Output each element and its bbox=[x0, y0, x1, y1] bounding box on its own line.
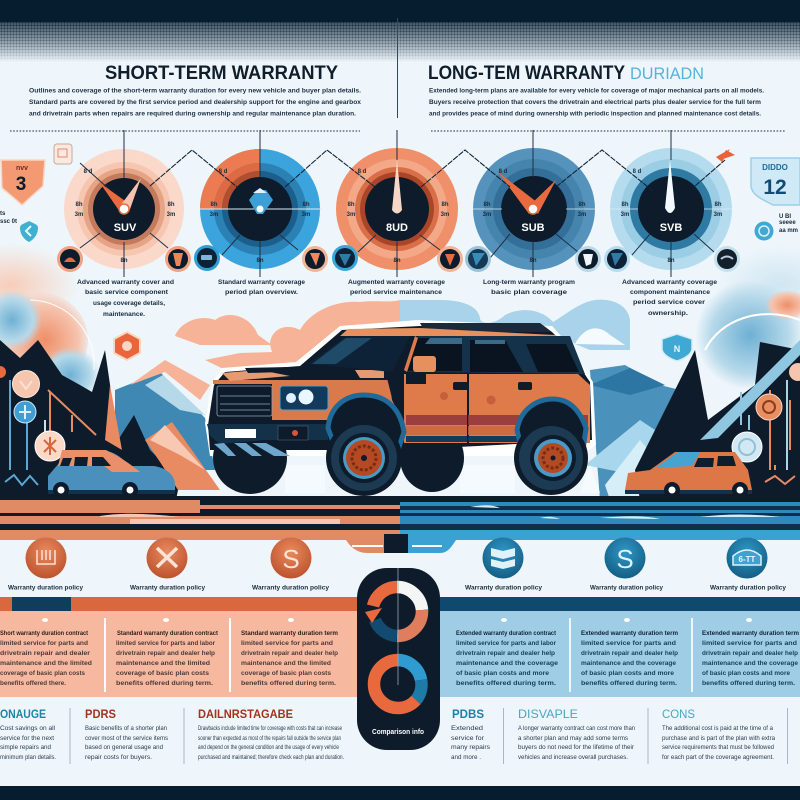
side note left: ssc 0t bbox=[0, 219, 17, 225]
column text 3 bbox=[702, 630, 799, 687]
headlight bbox=[280, 386, 328, 410]
icon: v badge bbox=[12, 370, 40, 398]
ground splash bbox=[285, 465, 600, 493]
column text 3: coverage of basic plan costs bbox=[241, 670, 332, 677]
roof bbox=[340, 328, 565, 342]
window frame bbox=[408, 336, 585, 374]
column text 3: maintenance and the limited bbox=[241, 660, 331, 667]
gauge 5: long-term light bbox=[604, 130, 740, 277]
gauge labels: 8n bbox=[120, 258, 128, 264]
short-term icon row bbox=[8, 538, 330, 592]
intro text: long-term: Extended long-term plans are available for every vehicle for coverage of major mechanical parts on all models. bbox=[429, 88, 764, 94]
heading: disadvantage: DISVAPLE bbox=[518, 707, 578, 721]
column text 1: drivetrain repair and dealer bbox=[0, 650, 91, 657]
orange pillar bbox=[404, 336, 418, 372]
icon: gauge label bbox=[726, 538, 768, 578]
footer band bbox=[0, 786, 800, 800]
windows bbox=[408, 338, 462, 371]
gauge captions: basic plan coverage bbox=[491, 289, 567, 296]
icon: crossed tools bbox=[146, 538, 188, 578]
column text 2: benefits offered during term. bbox=[116, 680, 213, 687]
text: pros: cover most of the service items bbox=[85, 735, 168, 742]
gauge labels: 3m bbox=[578, 212, 586, 218]
text: advantage: minimum plan details. bbox=[0, 754, 56, 761]
gauge labels: 3m bbox=[621, 212, 629, 218]
gauge captions: component maintenance bbox=[630, 289, 710, 296]
needle bbox=[392, 160, 402, 214]
roof rail bbox=[420, 323, 552, 332]
needles bbox=[100, 178, 141, 214]
intro text: short-term bbox=[29, 88, 361, 118]
column text 3: benefits offered during term. bbox=[241, 680, 336, 687]
text: disadvantage bbox=[518, 725, 635, 761]
gauge captions: Advanced warranty coverage bbox=[622, 279, 717, 286]
icon: burst badge bbox=[35, 431, 65, 461]
decorative poles bbox=[741, 380, 795, 484]
gauge 2: short-term blue bbox=[194, 130, 328, 277]
side note left bbox=[0, 211, 38, 242]
gauge captions: usage coverage details, bbox=[93, 300, 165, 307]
column text 3: Extended warranty duration term bbox=[702, 630, 799, 637]
gauge labels: 3m bbox=[347, 212, 355, 218]
rear wheel bbox=[514, 421, 588, 495]
gauge captions bbox=[77, 279, 717, 318]
text: cons bbox=[662, 725, 775, 761]
icon: shield badge: N bbox=[674, 344, 680, 354]
text: pros: and more . bbox=[451, 754, 481, 761]
gauge 1: short-term: SUV bbox=[114, 222, 137, 234]
column text 2: Extended warranty duration term bbox=[581, 630, 678, 637]
gauge labels: 8h bbox=[75, 202, 83, 208]
gauge labels: 8h bbox=[621, 202, 629, 208]
column text 3 bbox=[241, 630, 338, 687]
column text 3: limited service for parts and bbox=[702, 640, 797, 647]
header band bbox=[0, 0, 800, 118]
text: pros bbox=[451, 725, 490, 761]
icon: dollar: S bbox=[282, 544, 300, 574]
text: disadvantage: a shorter plan and may add some terms bbox=[518, 735, 628, 742]
column text 2 bbox=[581, 630, 678, 687]
icon labels: Warranty duration policy bbox=[130, 586, 206, 592]
text: disadvantage: and depend on the general condition and the usage of every vehicle bbox=[198, 744, 339, 751]
gauge captions: maintenance. bbox=[103, 311, 145, 318]
dark mountains bbox=[0, 340, 180, 500]
column text 3: Standard warranty duration term bbox=[241, 630, 338, 637]
intro text: long-term: and provides peace of mind during ownership with periodic inspection and planned maintenance cost details. bbox=[429, 110, 761, 118]
distant mountains bbox=[585, 365, 700, 500]
icon labels bbox=[8, 586, 330, 592]
gauge labels: 8n bbox=[667, 258, 675, 264]
text: disadvantage: purchased and maintained; therefore check each plan and duration. bbox=[198, 754, 344, 761]
column text 1: benefits offered during term. bbox=[456, 680, 556, 687]
badge: 3 months bbox=[1, 160, 45, 205]
distant mountains bbox=[115, 360, 215, 470]
text: disadvantage bbox=[198, 725, 344, 761]
column text 3: maintenance and the coverage bbox=[702, 660, 799, 667]
gauge labels: 3m bbox=[714, 212, 722, 218]
icon: book bbox=[482, 538, 524, 578]
gauge labels: 8h bbox=[302, 202, 310, 208]
gauge labels: 3m bbox=[441, 212, 449, 218]
column text 2: limited service for parts and labor bbox=[116, 640, 216, 647]
gauge captions: ownership. bbox=[648, 310, 688, 317]
needles bbox=[498, 172, 556, 214]
grille bbox=[217, 386, 272, 416]
icon: dollar bbox=[270, 538, 312, 578]
gauge captions: basic service component bbox=[85, 289, 169, 296]
gauge labels: 8h bbox=[210, 202, 218, 208]
heading: cons: CONS bbox=[662, 707, 695, 721]
icon: document tag bbox=[54, 144, 72, 164]
gauge 4: long-term bbox=[465, 130, 601, 277]
column text 1: maintenance and the limited bbox=[0, 660, 92, 667]
gauge labels: 3m bbox=[210, 212, 218, 218]
badge: 3 months: nvv bbox=[16, 165, 28, 172]
gauge labels: 8 d bbox=[358, 169, 367, 175]
gauge labels bbox=[347, 169, 449, 264]
gauge captions: Long-term warranty program bbox=[483, 279, 575, 286]
column text 2: maintenance and the coverage bbox=[581, 660, 677, 667]
column text 3: drivetrain repair and dealer help bbox=[241, 650, 338, 657]
text: disadvantage: vehicles and increase overall purchases. bbox=[518, 754, 628, 761]
section: long-term pros and cons bbox=[451, 707, 788, 764]
column text 1: maintenance and the coverage bbox=[456, 660, 559, 667]
gauge icons bbox=[332, 245, 463, 272]
gauge labels: 8 d bbox=[633, 169, 642, 175]
gauge labels: 8n bbox=[256, 258, 264, 264]
icon: globe badge bbox=[14, 401, 36, 423]
small blue car bbox=[48, 450, 175, 498]
title: short-term warranty: SHORT-TERM WARRANTY bbox=[105, 62, 338, 84]
text: disadvantage: Drawbacks include limited time for coverage with costs that can increase bbox=[198, 725, 342, 732]
column text 1: limited service for parts and bbox=[0, 640, 88, 647]
column text 2: benefits offered during term. bbox=[581, 680, 677, 687]
gauge labels: 8n bbox=[529, 258, 537, 264]
gauge labels: 3m bbox=[75, 212, 83, 218]
title: long-term warranty duration: LONG-TEM WARRANTY bbox=[428, 62, 625, 84]
big SUV bbox=[205, 320, 600, 496]
side note right: seeee bbox=[779, 220, 796, 226]
icon: pale coin badge bbox=[732, 432, 762, 462]
column text 2: coverage of basic plan costs bbox=[116, 670, 210, 677]
column text 2: drivetrain repair and dealer help bbox=[581, 650, 678, 657]
icon: hexagon badge bbox=[114, 332, 140, 360]
heading: pros: PDBS bbox=[452, 707, 484, 721]
gauge captions: Advanced warranty cover and bbox=[77, 279, 174, 286]
centre comparison pill bbox=[357, 568, 440, 750]
gauge labels: 8h bbox=[167, 202, 175, 208]
mirror bbox=[413, 356, 436, 372]
gauge centre icon bbox=[249, 188, 273, 214]
badge: 12 months bbox=[751, 158, 800, 205]
scene: left landscape bbox=[0, 290, 400, 500]
gauge labels: 8 d bbox=[84, 169, 93, 175]
connector lines between gauges bbox=[150, 150, 725, 191]
column text 1: benefits offered there. bbox=[0, 680, 66, 687]
gauge 1: short-term bbox=[57, 130, 191, 277]
orange foreground mountain bbox=[105, 385, 220, 490]
intro text: short-term: and drivetrain parts when repairs are required during ownership and regular maintenance plan duration. bbox=[29, 110, 356, 118]
gauge labels bbox=[75, 169, 175, 264]
column text 2 bbox=[116, 630, 218, 687]
badge: 12 months: 12 bbox=[763, 176, 787, 199]
front wheel bbox=[326, 420, 402, 496]
gauge 5: long-term light: SVB bbox=[660, 222, 682, 234]
gauge icons bbox=[57, 246, 191, 272]
column text 1: limited service for parts and labor bbox=[456, 640, 557, 647]
column text 3: benefits offered during term. bbox=[702, 680, 795, 687]
gauge captions: period plan overview. bbox=[225, 289, 298, 296]
icon: edge badge bbox=[0, 366, 6, 378]
hidden wheels bbox=[213, 422, 464, 494]
clouds: blue bbox=[400, 300, 630, 352]
column text 2: drivetrain repair and dealer help bbox=[116, 650, 215, 657]
column text 1 bbox=[0, 630, 92, 687]
body bbox=[208, 326, 592, 450]
intro text: short-term: Standard parts are covered by the first service period and dealership support for the engine and gearbox bbox=[29, 99, 361, 106]
icon labels: Warranty duration policy bbox=[465, 586, 543, 592]
bottom ring chart bbox=[374, 660, 421, 708]
door handles and dents bbox=[440, 382, 532, 404]
column text 2: of basic plan costs and more bbox=[581, 670, 675, 677]
gauge labels: 8h bbox=[578, 202, 586, 208]
text: pros: repair costs for buyers. bbox=[85, 754, 152, 761]
gauge labels: 8h bbox=[714, 202, 722, 208]
icon labels: Warranty duration policy bbox=[710, 586, 787, 592]
column text 2: maintenance and the limited bbox=[116, 660, 210, 667]
icon: shield badge bbox=[662, 334, 692, 361]
intro text: short-term: Outlines and coverage of the short-term warranty duration for every new vehicle and buyer plan details. bbox=[29, 88, 361, 94]
content background bbox=[0, 540, 800, 786]
stippled sky blob bbox=[0, 290, 100, 403]
text: cons: The additional cost is paid at the time of a bbox=[662, 725, 773, 732]
gauge labels: 8h bbox=[483, 202, 491, 208]
column text 2: Standard warranty duration contract bbox=[117, 630, 218, 637]
section: short-term pros and cons bbox=[0, 707, 344, 764]
text: advantage: Cost savings on all bbox=[0, 725, 55, 732]
gauge labels: 8h bbox=[347, 202, 355, 208]
badge: 3 months: 3 bbox=[16, 174, 26, 195]
icon: star burst arrow bbox=[716, 149, 735, 162]
gauge labels: 3m bbox=[167, 212, 175, 218]
column text 1: Short warranty duration contract bbox=[0, 630, 88, 637]
gauge captions: period service cover bbox=[633, 299, 705, 306]
heading: disadvantage: DAILNRSTAGABE bbox=[198, 707, 293, 721]
panel: short-term details bbox=[0, 597, 358, 697]
gauge icons bbox=[194, 245, 328, 272]
side panel bbox=[404, 374, 590, 443]
icon: gloves bbox=[26, 538, 66, 578]
gauge labels: 8n bbox=[393, 258, 401, 264]
text: advantage: simple repairs and bbox=[0, 744, 51, 751]
column text 1 bbox=[456, 630, 559, 687]
icon: gauge label: 6-TT bbox=[739, 555, 756, 564]
column text 3: limited service for parts and bbox=[241, 640, 333, 647]
side note right bbox=[754, 214, 798, 240]
text: cons: purchase and is part of the plan with extra bbox=[662, 735, 775, 742]
icon: edge badge bbox=[789, 363, 800, 381]
column text 2: limited service for parts and bbox=[581, 640, 676, 647]
corner stipple blobs bbox=[0, 243, 800, 327]
column text 1: of basic plan costs and more bbox=[456, 670, 550, 677]
arrow head bbox=[365, 608, 382, 623]
text: pros: Extended bbox=[451, 725, 484, 732]
dark mountains bbox=[635, 342, 800, 500]
gauge labels bbox=[621, 169, 722, 264]
gauge labels bbox=[210, 169, 310, 264]
text: pros: many repairs bbox=[451, 744, 490, 751]
road: left and right bands bbox=[0, 496, 800, 554]
column text 1: Extended warranty duration contract bbox=[456, 630, 556, 637]
panel: short-term header bbox=[10, 62, 361, 131]
gauge labels: 8h bbox=[441, 202, 449, 208]
text: pros: Basic benefits of a shorter plan bbox=[85, 725, 167, 732]
title: long-term warranty duration: DURIADN bbox=[630, 64, 704, 83]
windshield bbox=[308, 336, 410, 372]
front fender and fascia bbox=[213, 367, 405, 425]
text: cons: for each part of the coverage agreement. bbox=[662, 754, 774, 761]
gauge captions: period service maintenance bbox=[350, 289, 442, 296]
intro text: long-term bbox=[429, 88, 764, 118]
gauge captions: Standard warranty coverage bbox=[218, 279, 305, 286]
text: advantage: service for the next bbox=[0, 735, 54, 742]
text: pros: based on general usage and bbox=[85, 744, 163, 751]
gauge icons bbox=[604, 246, 740, 272]
gauge labels: 3m bbox=[302, 212, 310, 218]
top ring chart bbox=[373, 587, 422, 636]
wheel arches bbox=[328, 395, 586, 450]
heading: pros: PDRS bbox=[85, 707, 116, 721]
clouds: orange bbox=[175, 300, 400, 420]
side note right: aa mm bbox=[779, 228, 798, 234]
column text 1: drivetrain repair and dealer help bbox=[456, 650, 555, 657]
icon labels: Warranty duration policy bbox=[8, 586, 84, 592]
gauge 4: long-term: SUB bbox=[521, 222, 545, 234]
scene: right landscape bbox=[400, 280, 800, 500]
text: disadvantage: sooner than expected as most of the repairs fall outside the service plan bbox=[198, 735, 341, 742]
gauge captions: Augmented warranty coverage bbox=[348, 279, 445, 286]
text: advantage bbox=[0, 725, 56, 761]
text: disadvantage: buyers do not need for the lifetime of their bbox=[518, 744, 635, 751]
panel: long-term header bbox=[428, 62, 785, 131]
column text 1: coverage of basic plan costs bbox=[0, 670, 86, 677]
gauge labels bbox=[483, 169, 586, 264]
column text 3: drivetrain repair and dealer help bbox=[702, 650, 798, 657]
gauge labels: 8 d bbox=[499, 169, 508, 175]
icon: dollar: S bbox=[616, 544, 634, 574]
icon: dollar bbox=[604, 538, 646, 578]
side note left: ts bbox=[0, 211, 6, 217]
side note right: U BI bbox=[779, 214, 791, 220]
icon labels: Warranty duration policy bbox=[252, 586, 330, 592]
small orange car bbox=[625, 452, 752, 498]
icon: target badge bbox=[756, 394, 782, 420]
icon labels: Warranty duration policy bbox=[590, 586, 664, 592]
heading: advantage: ONAUGE bbox=[0, 707, 46, 721]
bumper bbox=[207, 424, 328, 456]
needle bbox=[665, 160, 675, 213]
white outline bbox=[205, 320, 596, 456]
centre comparison pill: Comparison info bbox=[372, 727, 424, 736]
stippled sky blob bbox=[695, 280, 800, 390]
text: cons: service requirements that must be followed bbox=[662, 744, 774, 751]
gauge labels: 3m bbox=[483, 212, 491, 218]
intro text: long-term: Buyers receive protection that covers the drivetrain and electrical parts plus dealer service for the full term bbox=[429, 99, 761, 106]
gauge icons bbox=[465, 246, 601, 272]
text: pros: service for bbox=[451, 735, 485, 742]
gauge 3: short-term orange bbox=[332, 130, 463, 277]
panel: long-term details bbox=[440, 597, 800, 697]
text: disadvantage: A longer warranty contract can cost more than bbox=[518, 725, 635, 732]
gauge labels: 8 d bbox=[219, 169, 228, 175]
small decorative poles bbox=[5, 380, 96, 485]
badge: 12 months: DIDDO bbox=[762, 163, 788, 172]
gauge 3: short-term orange: 8UD bbox=[386, 222, 408, 234]
icon labels bbox=[465, 586, 787, 592]
text: pros bbox=[85, 725, 168, 761]
column text 3: of basic plan costs and more bbox=[702, 670, 791, 677]
long-term icon row bbox=[465, 538, 787, 592]
